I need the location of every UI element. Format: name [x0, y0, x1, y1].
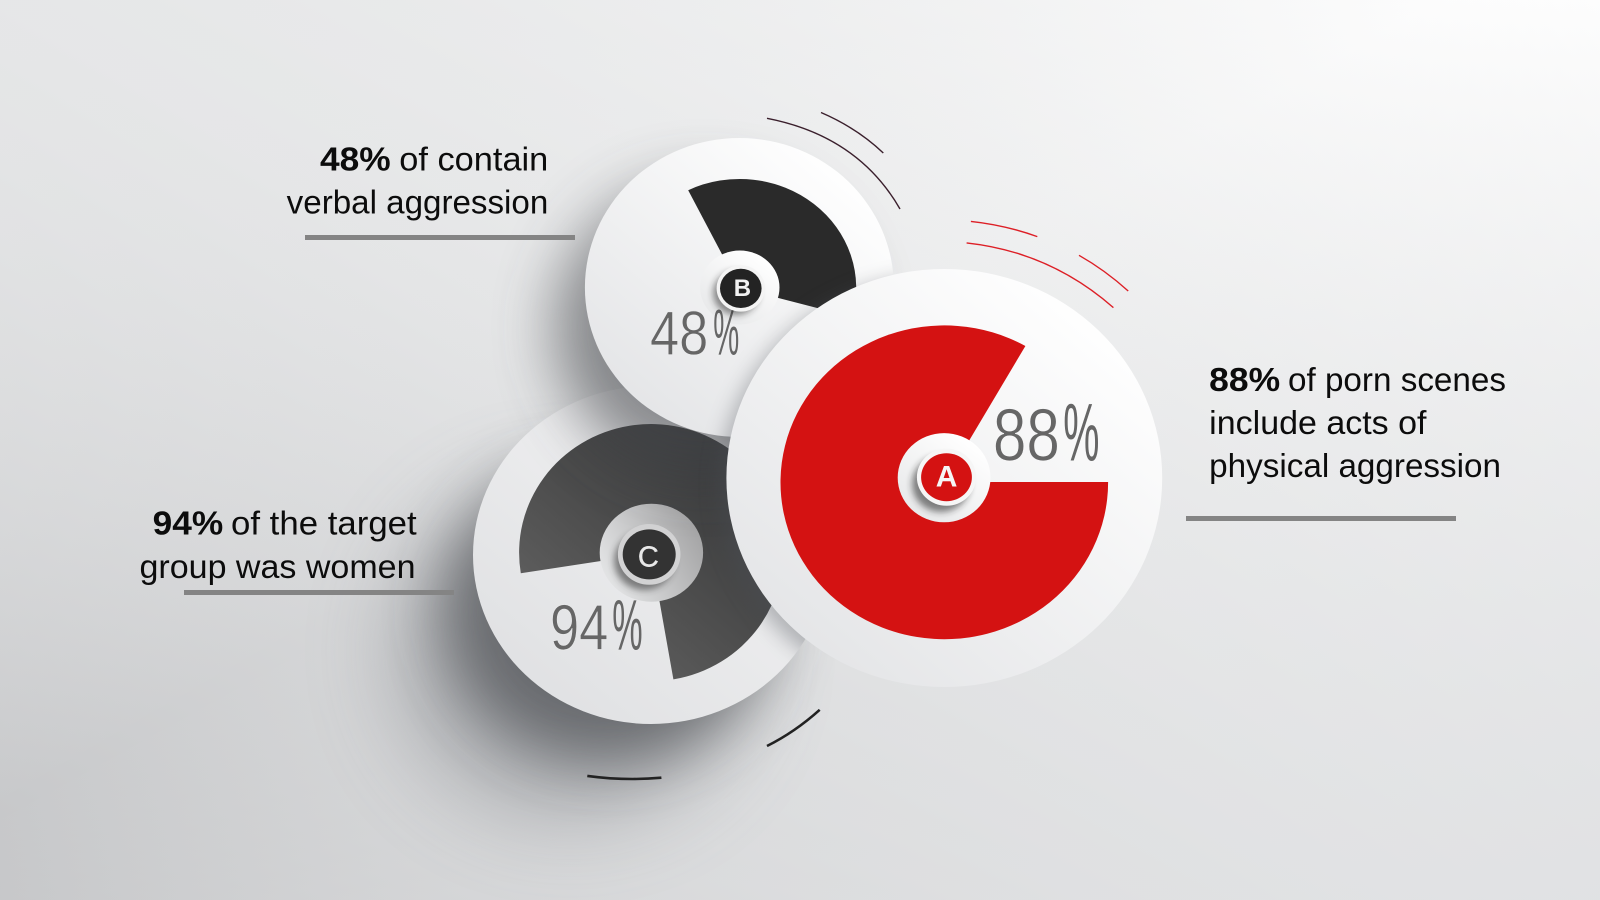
value 94%: 94	[550, 592, 608, 664]
panel: disc C: %	[612, 586, 643, 666]
callout: physical aggression: of porn scenes	[1288, 361, 1506, 398]
value 48%: 48	[650, 300, 708, 369]
panel: disc A	[719, 269, 1162, 696]
badge A	[912, 449, 976, 512]
panel: disc A: %	[1063, 388, 1100, 479]
value 88%: 88	[993, 394, 1060, 477]
callout: verbal aggression	[287, 140, 575, 240]
callout: target group	[140, 504, 454, 595]
badge C: C	[638, 542, 659, 574]
arcs near disc C	[587, 710, 820, 779]
panel: disc C	[400, 386, 829, 810]
callout: target group: 94%	[153, 504, 223, 541]
badge B	[713, 265, 765, 315]
wedge C	[519, 424, 783, 679]
panel: disc B	[555, 138, 894, 473]
badge A: A	[936, 461, 957, 494]
badge C	[614, 524, 680, 590]
callout: physical aggression: physical aggression	[1209, 447, 1501, 484]
disc A base	[726, 269, 1162, 687]
callout: verbal aggression: 48%	[320, 140, 391, 178]
wedge A	[781, 325, 1108, 639]
hub A	[898, 433, 990, 522]
shadow of disc C	[400, 460, 775, 810]
callout: target group: group was women	[140, 548, 416, 585]
callout: verbal aggression: verbal aggression	[287, 184, 548, 220]
callout: physical aggression	[1186, 361, 1506, 521]
disc B base	[585, 138, 894, 437]
callout: target group: of the target	[231, 504, 417, 541]
hub B	[700, 250, 780, 324]
panel: disc B: %	[713, 296, 739, 369]
wedge B	[688, 179, 856, 317]
callout: physical aggression: include acts of	[1209, 404, 1427, 441]
shadow of disc B	[555, 183, 855, 473]
callout: physical aggression: 88%	[1209, 361, 1280, 398]
disc C base	[473, 386, 829, 724]
hub C	[600, 504, 703, 602]
arcs near disc B	[767, 112, 900, 209]
arcs near disc A	[967, 221, 1128, 308]
value 94%	[550, 586, 643, 666]
callout: verbal aggression: of contain	[399, 140, 548, 178]
badge B: B	[734, 275, 751, 302]
shadow of disc A	[715, 270, 894, 656]
